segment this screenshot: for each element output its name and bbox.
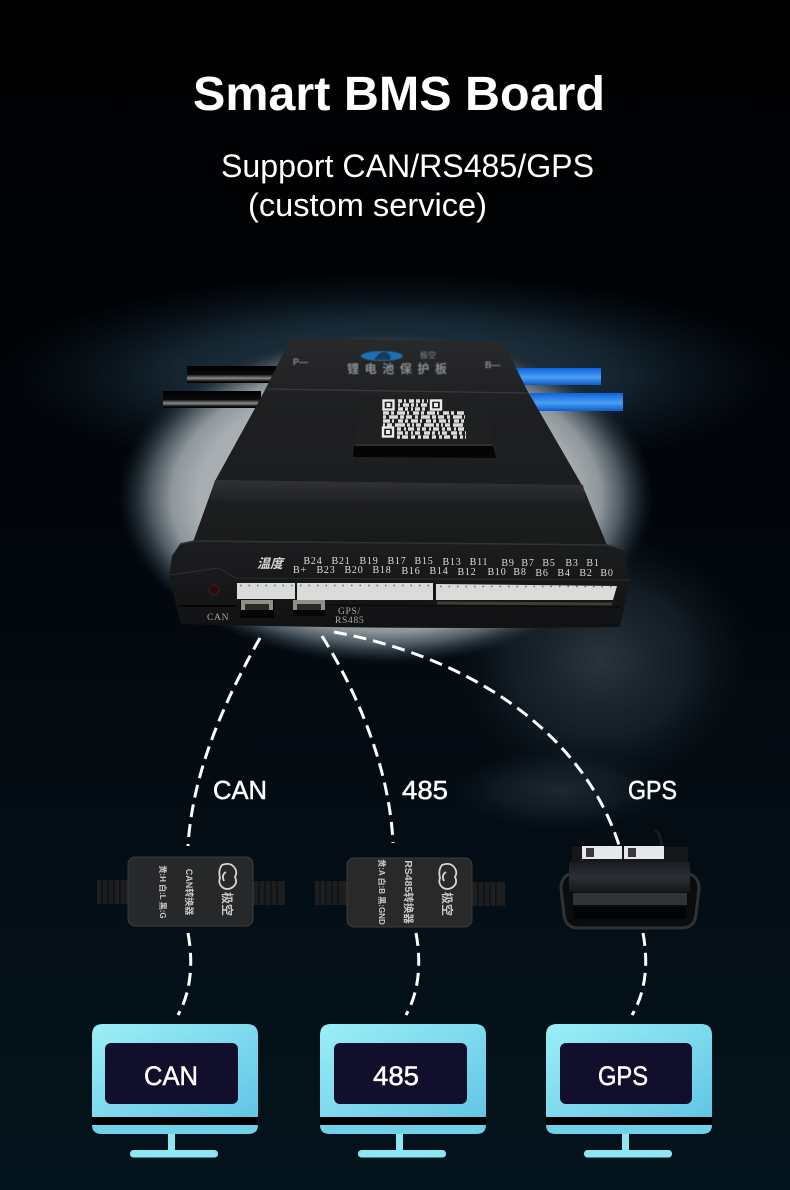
- monitor: 485: 485: [373, 1061, 419, 1091]
- interface labels: 485: [402, 775, 448, 805]
- port labels: [207, 607, 364, 626]
- cloud logo: [439, 864, 456, 889]
- subtitle: Support CAN/RS485/GPS: [221, 148, 594, 184]
- pin labels row 2: B23: [316, 565, 336, 576]
- GPS module: [561, 830, 699, 928]
- CAN converter: CAN转换器: [184, 869, 195, 915]
- subtitle: [221, 148, 594, 223]
- CAN converter: 黄:H 白:L 黑:G: [158, 865, 168, 919]
- subtitle: (custom service): [248, 187, 487, 223]
- board top cover: [193, 338, 607, 545]
- handle frame: [561, 874, 699, 928]
- cloud logo: [219, 864, 236, 889]
- RS485 converter: RS485转换器: [402, 860, 415, 924]
- pin labels row 2: B16: [401, 566, 421, 577]
- logo and board name: 锂电池保护板: [347, 361, 447, 376]
- logo and board name: 极空: [420, 350, 436, 360]
- CAN converter: [97, 857, 285, 926]
- black cables: [163, 366, 277, 408]
- interface labels: CAN: [213, 775, 267, 805]
- pin labels row 2: B0: [600, 568, 614, 579]
- port labels: GPS/: [338, 607, 361, 617]
- monitor: GPS: GPS: [598, 1061, 648, 1091]
- pin labels row 1: B17: [387, 556, 407, 567]
- pin labels row 1: B11: [470, 557, 488, 568]
- CAN and GPS ports: [240, 600, 325, 618]
- monitor: 485: [320, 1024, 486, 1158]
- pin labels row 1: B9: [501, 558, 515, 569]
- front panel: [169, 541, 630, 628]
- logo and board name: B—: [485, 360, 500, 370]
- monitor: GPS: [546, 1024, 712, 1158]
- pin labels row 2: B18: [372, 565, 392, 576]
- pin labels row 2: B14: [429, 566, 449, 577]
- monitor: CAN: [92, 1024, 258, 1158]
- BMS board: [163, 338, 630, 628]
- pin labels row 1: B13: [442, 557, 462, 568]
- pin labels row 1: B15: [414, 556, 434, 567]
- pin labels row 1: B7: [521, 558, 535, 569]
- temperature label: 温度: [257, 556, 285, 571]
- interface labels: [213, 775, 677, 805]
- connectors: [237, 583, 617, 600]
- blue cables: [516, 368, 623, 411]
- interface labels: GPS: [628, 775, 677, 805]
- pin labels row 1: B5: [542, 558, 556, 569]
- pin labels row 2: B12: [457, 567, 477, 578]
- dashed connection lines: [178, 632, 646, 1015]
- port labels: RS485: [335, 616, 364, 626]
- pin labels row 2: B8: [513, 567, 527, 578]
- pin labels row 2: B6: [535, 568, 549, 579]
- pin labels row 2: B10: [487, 567, 507, 578]
- pin labels row 2: B4: [557, 568, 571, 579]
- pin labels row 2: [293, 565, 614, 579]
- QR code label: [351, 396, 500, 459]
- RS485 converter: [315, 858, 505, 927]
- pin labels row 1: B19: [359, 556, 379, 567]
- logo and board name: [293, 350, 500, 376]
- title: Smart BMS Board: [193, 68, 605, 121]
- pin labels row 1: B1: [586, 558, 600, 569]
- logo and board name: P—: [293, 357, 308, 367]
- pin labels row 1: [303, 556, 600, 569]
- pin labels row 1: B24: [303, 556, 323, 567]
- RS485 converter: 极空: [440, 892, 455, 916]
- LED: [209, 585, 219, 595]
- monitor: CAN: CAN: [144, 1061, 198, 1091]
- CAN converter: 极空: [220, 892, 235, 916]
- pin labels row 1: B21: [331, 556, 351, 567]
- pin labels row 2: B20: [344, 565, 364, 576]
- RS485 converter: 黄:A 白:B 黑:GND: [377, 859, 387, 925]
- pin labels row 2: B2: [579, 568, 593, 579]
- pin labels row 2: B+: [293, 565, 307, 576]
- pin labels row 1: B3: [565, 558, 579, 569]
- port labels: CAN: [207, 613, 229, 623]
